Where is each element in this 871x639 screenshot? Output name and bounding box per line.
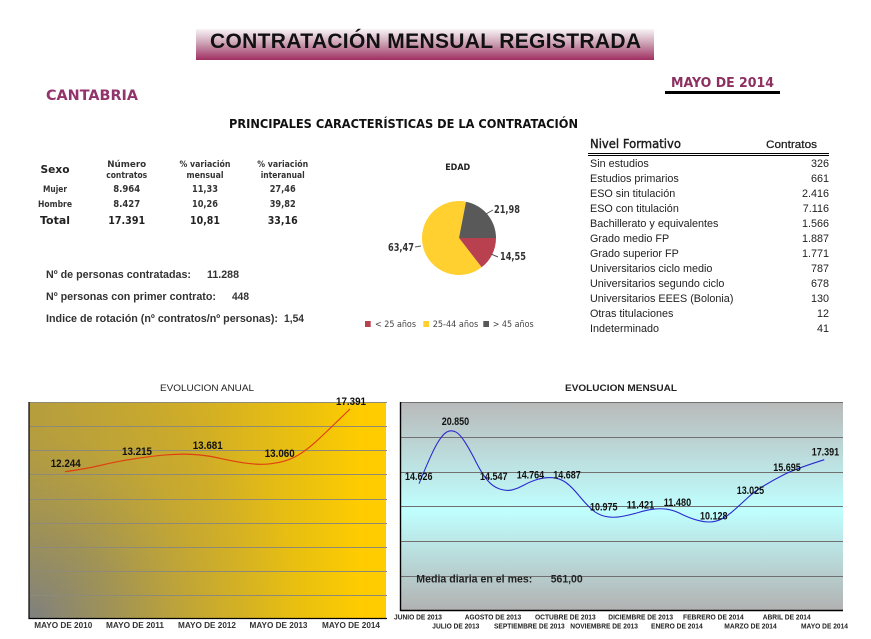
chart: monthly evolution: 13.025 bbox=[737, 485, 764, 497]
chart: monthly evolution: MAYO DE 2014 bbox=[801, 624, 848, 630]
table: contracts by sex: Mujer bbox=[43, 185, 67, 195]
table: contracts by sex: Número bbox=[107, 160, 146, 170]
chart: monthly evolution: 17.391 bbox=[812, 447, 839, 459]
chart: monthly evolution bbox=[394, 383, 848, 630]
table: education level: 12 bbox=[817, 308, 829, 320]
chart: annual evolution: 12.244 bbox=[51, 458, 81, 470]
table: contracts by sex: 39,82 bbox=[270, 199, 296, 210]
table: education level: Contratos bbox=[766, 139, 818, 151]
table: education level: 661 bbox=[811, 173, 829, 185]
table: education level: 678 bbox=[811, 278, 829, 290]
table: contracts by sex: 27,46 bbox=[270, 184, 296, 195]
table: education level: 130 bbox=[811, 293, 829, 305]
table: contracts by sex: 10,26 bbox=[192, 199, 218, 210]
summary figures: 448 bbox=[232, 291, 249, 303]
chart: monthly evolution: MARZO DE 2014 bbox=[724, 624, 777, 630]
chart: annual evolution: 13.215 bbox=[122, 446, 152, 458]
chart: annual evolution: EVOLUCION ANUAL bbox=[160, 383, 254, 393]
table: contracts by sex: Hombre bbox=[38, 200, 72, 210]
table: education level: Universitarios EEES (Bolonia) bbox=[590, 293, 733, 305]
table: education level: 7.116 bbox=[803, 203, 829, 215]
table: education level bbox=[588, 137, 829, 335]
table: education level: 326 bbox=[811, 158, 829, 170]
table: education level: Bachillerato y equivalentes bbox=[590, 218, 719, 230]
pie chart: age: > 45 años bbox=[493, 320, 534, 330]
table: education level: Indeterminado bbox=[590, 323, 659, 335]
pie chart: age: EDAD bbox=[445, 163, 470, 173]
table: contracts by sex: 33,16 bbox=[268, 214, 298, 227]
section heading: PRINCIPALES CARACTERÍSTICAS DE LA CONTRATACIÓN bbox=[229, 116, 578, 131]
summary figures: 1,54 bbox=[284, 313, 305, 325]
table: education level: Otras titulaciones bbox=[590, 308, 674, 320]
chart: monthly evolution: 11.480 bbox=[664, 497, 691, 509]
chart: monthly evolution: 14.687 bbox=[553, 470, 581, 482]
summary figures: Nº personas con primer contrato: bbox=[46, 291, 216, 303]
table: education level: Estudios primarios bbox=[590, 173, 679, 185]
table: education level: ESO sin titulación bbox=[590, 188, 675, 200]
chart: monthly evolution: NOVIEMBRE DE 2013 bbox=[570, 624, 638, 630]
table: education level: 1.887 bbox=[802, 233, 829, 245]
table: education level: Grado superior FP bbox=[590, 248, 679, 260]
chart: monthly evolution: SEPTIEMBRE DE 2013 bbox=[494, 624, 565, 630]
chart: annual evolution: MAYO DE 2013 bbox=[250, 620, 308, 630]
table: contracts by sex: interanual bbox=[261, 171, 305, 181]
chart: annual evolution: MAYO DE 2011 bbox=[106, 620, 164, 630]
chart: monthly evolution: JULIO DE 2013 bbox=[432, 624, 479, 630]
chart: annual evolution: MAYO DE 2012 bbox=[178, 620, 236, 630]
table: education level: Universitarios segundo ciclo bbox=[590, 278, 724, 290]
chart: monthly evolution: 14.764 bbox=[517, 470, 545, 482]
table: education level: 2.416 bbox=[802, 188, 829, 200]
chart: monthly evolution: Media diaria en el mes: bbox=[416, 573, 532, 585]
pie chart: age: < 25 años bbox=[375, 320, 417, 330]
summary figures: Nº de personas contratadas: bbox=[46, 269, 191, 281]
table: education level: 787 bbox=[811, 263, 829, 275]
table: education level: Nivel Formativo bbox=[590, 137, 681, 151]
table: contracts by sex: contratos bbox=[106, 171, 147, 181]
table: contracts by sex bbox=[38, 159, 308, 227]
chart: monthly evolution: 14.547 bbox=[480, 471, 508, 483]
chart: monthly evolution: 561,00 bbox=[551, 573, 583, 585]
chart: monthly evolution: OCTUBRE DE 2013 bbox=[535, 614, 596, 622]
chart: monthly evolution: 11.421 bbox=[627, 499, 654, 511]
table: education level: Universitarios ciclo medio bbox=[590, 263, 712, 275]
table: contracts by sex: 17.391 bbox=[108, 214, 145, 227]
chart: annual evolution: 13.681 bbox=[193, 440, 223, 452]
chart: monthly evolution: 20.850 bbox=[442, 416, 469, 428]
pie chart: age: 21,98 bbox=[494, 204, 520, 216]
chart: monthly evolution: 10.128 bbox=[700, 510, 728, 522]
chart: monthly evolution: 10.975 bbox=[590, 502, 618, 514]
title banner bbox=[196, 29, 654, 60]
table: education level: 41 bbox=[817, 323, 829, 335]
chart: annual evolution bbox=[29, 383, 387, 630]
table: contracts by sex: 8.964 bbox=[113, 184, 141, 195]
chart: monthly evolution: ENERO DE 2014 bbox=[651, 624, 703, 630]
date label: MAYO DE 2014 bbox=[671, 76, 774, 91]
region name: CANTABRIA bbox=[46, 88, 138, 104]
summary figures bbox=[46, 269, 305, 325]
chart: annual evolution: MAYO DE 2014 bbox=[322, 620, 380, 630]
table: contracts by sex: % variación bbox=[180, 159, 230, 170]
chart: monthly evolution: 14.626 bbox=[405, 471, 432, 483]
table: contracts by sex: 11,33 bbox=[192, 184, 218, 195]
table: contracts by sex: mensual bbox=[186, 171, 224, 181]
table: education level: Grado medio FP bbox=[590, 233, 669, 245]
chart: monthly evolution: JUNIO DE 2013 bbox=[394, 614, 442, 622]
chart: annual evolution: 13.060 bbox=[265, 448, 295, 460]
table: contracts by sex: Sexo bbox=[40, 163, 70, 176]
table: education level: 1.566 bbox=[802, 218, 829, 230]
table: contracts by sex: 8.427 bbox=[113, 199, 140, 210]
table: contracts by sex: Total bbox=[40, 214, 70, 227]
chart: annual evolution: MAYO DE 2010 bbox=[34, 620, 93, 630]
chart: monthly evolution: 15.695 bbox=[773, 462, 801, 474]
table: contracts by sex: % variación bbox=[257, 159, 308, 170]
chart: monthly evolution: EVOLUCION MENSUAL bbox=[565, 383, 678, 393]
chart: annual evolution: 17.391 bbox=[336, 396, 366, 408]
summary figures: 11.288 bbox=[207, 269, 239, 281]
chart: monthly evolution: DICIEMBRE DE 2013 bbox=[608, 614, 673, 622]
table: education level: ESO con titulación bbox=[590, 203, 679, 215]
pie chart: age: 14,55 bbox=[500, 251, 526, 263]
pie chart: age bbox=[365, 163, 534, 330]
chart: monthly evolution: AGOSTO DE 2013 bbox=[465, 614, 521, 622]
pie chart: age: 63,47 bbox=[388, 242, 414, 254]
pie chart: age: 25-44 años bbox=[433, 320, 479, 330]
table: contracts by sex: 10,81 bbox=[190, 214, 220, 227]
chart: monthly evolution: FEBRERO DE 2014 bbox=[683, 614, 744, 622]
summary figures: Indice de rotación (nº contratos/nº personas): bbox=[46, 313, 278, 325]
table: education level: Sin estudios bbox=[590, 158, 649, 170]
chart: monthly evolution: ABRIL DE 2014 bbox=[763, 614, 811, 622]
table: education level: 1.771 bbox=[802, 248, 829, 260]
title banner: CONTRATACIÓN MENSUAL REGISTRADA bbox=[210, 29, 641, 53]
